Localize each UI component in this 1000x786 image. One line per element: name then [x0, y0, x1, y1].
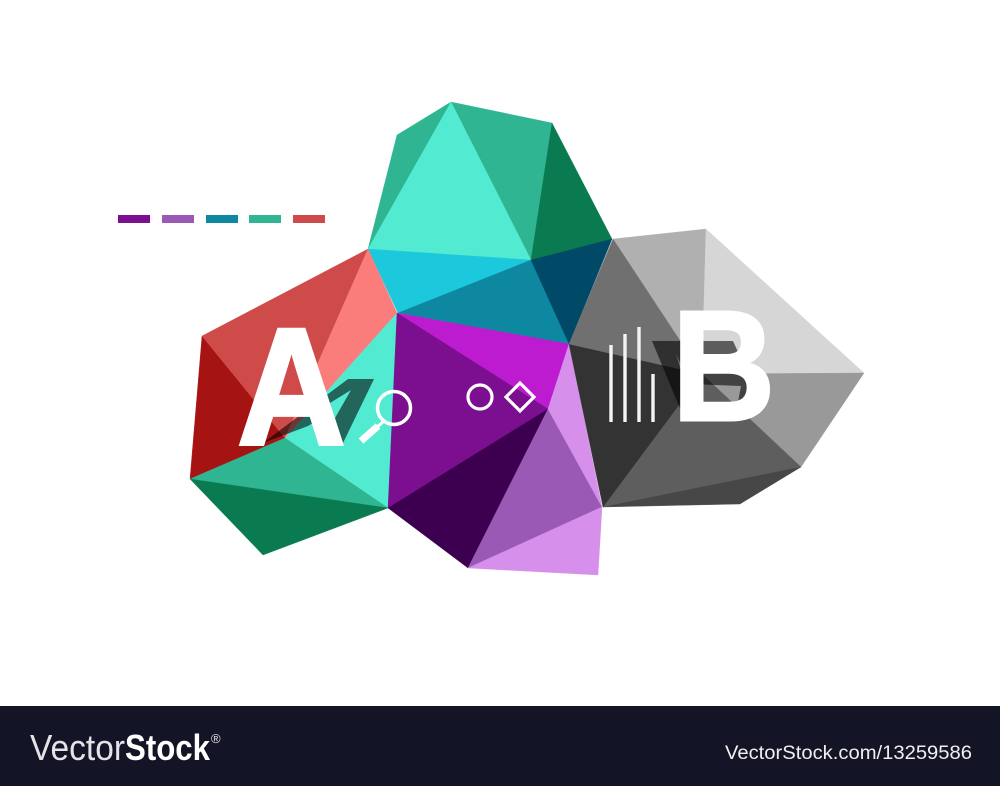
chart: vertical bars: [609, 327, 655, 422]
icon: circle: [468, 385, 492, 409]
heading: letter A: A: [238, 295, 345, 480]
footer registered mark: ®: [211, 731, 221, 746]
panel: top teal polygon: [368, 102, 612, 344]
icon: diamond: [506, 383, 534, 411]
panel: right grey polygon: [569, 229, 864, 507]
footer image id: VectorStock.com/13259586: [725, 742, 972, 764]
footer bar: [0, 706, 1000, 786]
footer logo: VectorStock: [30, 727, 211, 768]
panel: left red and green polygon: [190, 249, 397, 555]
panel: centre purple polygon: [388, 313, 602, 575]
legend dashes: [118, 215, 325, 223]
icon: arrow shadow behind A: [263, 379, 374, 443]
icon: magnifying glass: [361, 392, 410, 441]
icon: arrow shadow behind B: [652, 341, 749, 418]
heading: letter B: B: [672, 278, 775, 453]
